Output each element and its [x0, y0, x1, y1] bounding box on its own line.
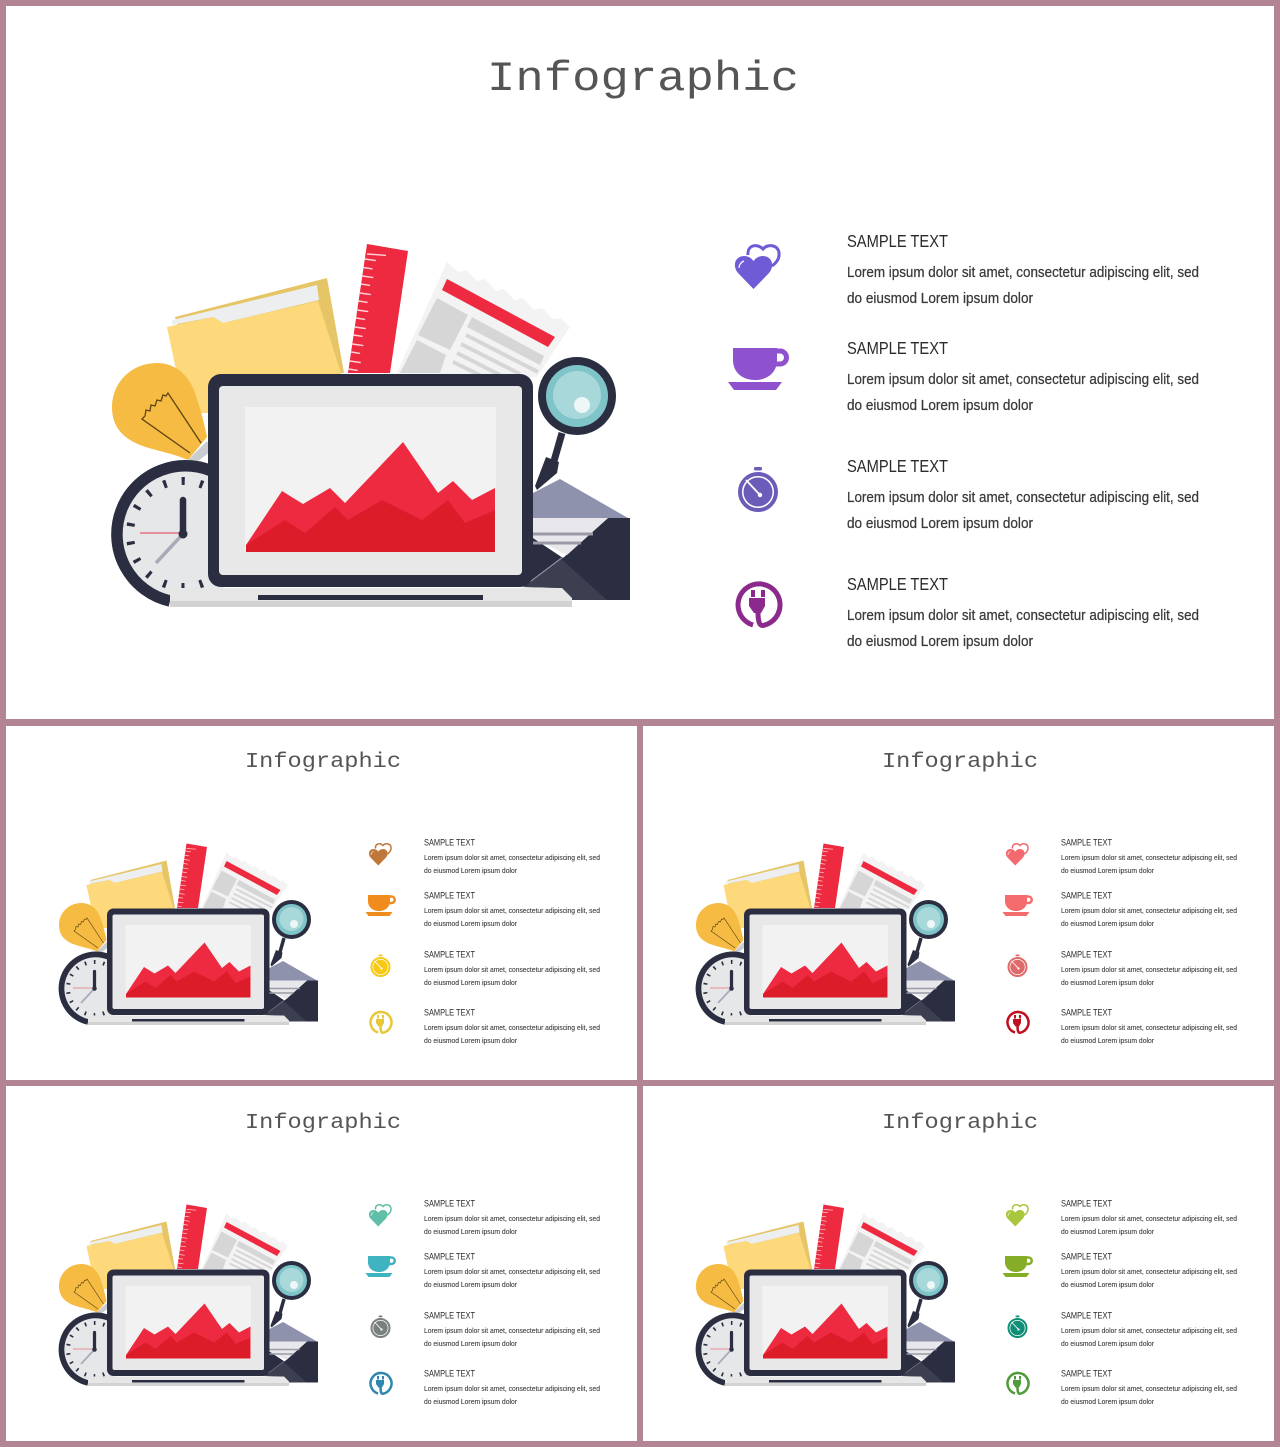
text blocks: SAMPLE TEXT [424, 950, 476, 960]
text blocks: Lorem ipsum dolor sit amet, consectetur adipiscing elit, sed [424, 853, 600, 862]
icon: plug [1008, 1373, 1029, 1394]
folder [167, 278, 344, 413]
text blocks: SAMPLE TEXT [1061, 1310, 1113, 1320]
icon: cup [366, 1256, 395, 1277]
text block 3: Lorem ipsum dolor sit amet, consectetur adipiscing elit, sed [847, 490, 1199, 506]
text blocks: Lorem ipsum dolor sit amet, consectetur adipiscing elit, sed [424, 1023, 600, 1032]
text blocks: do eiusmod Lorem ipsum dolor [1061, 1036, 1155, 1045]
text blocks: do eiusmod Lorem ipsum dolor [424, 978, 518, 987]
icon: plug [738, 584, 780, 626]
clock [117, 466, 251, 601]
panel: red variant [643, 726, 1274, 1080]
text blocks: SAMPLE TEXT [424, 1310, 476, 1320]
icon: cup [1002, 895, 1032, 916]
text blocks: do eiusmod Lorem ipsum dolor [424, 1280, 518, 1289]
magnifying glass [535, 357, 616, 490]
text blocks: SAMPLE TEXT [424, 1368, 476, 1378]
illustration [696, 1204, 955, 1386]
icon: stopwatch [1008, 1316, 1026, 1337]
illustration [59, 1204, 318, 1386]
icon: hearts [1006, 1205, 1028, 1226]
laptop screen [208, 374, 533, 587]
text blocks: SAMPLE TEXT [1061, 1252, 1113, 1262]
ruler [348, 244, 408, 373]
icon: hearts [735, 246, 779, 289]
text blocks: SAMPLE TEXT [1061, 1198, 1113, 1208]
text blocks: Lorem ipsum dolor sit amet, consectetur adipiscing elit, sed [424, 906, 600, 915]
title: Infographic [245, 1112, 401, 1135]
newspaper [395, 262, 570, 377]
text blocks: do eiusmod Lorem ipsum dolor [1061, 1397, 1155, 1406]
text block 4: SAMPLE TEXT [847, 574, 948, 594]
text blocks: SAMPLE TEXT [1061, 838, 1113, 848]
icon: plug [1008, 1012, 1029, 1033]
text blocks: Lorem ipsum dolor sit amet, consectetur adipiscing elit, sed [1061, 1267, 1237, 1276]
text blocks: Lorem ipsum dolor sit amet, consectetur adipiscing elit, sed [1061, 1326, 1237, 1335]
text blocks: Lorem ipsum dolor sit amet, consectetur adipiscing elit, sed [424, 965, 600, 974]
icon: plug [371, 1373, 392, 1394]
text blocks [1061, 838, 1237, 1045]
text block 1: do eiusmod Lorem ipsum dolor [847, 291, 1033, 307]
text blocks: SAMPLE TEXT [1061, 890, 1113, 900]
text blocks: Lorem ipsum dolor sit amet, consectetur adipiscing elit, sed [424, 1384, 600, 1393]
text blocks: do eiusmod Lorem ipsum dolor [424, 1036, 518, 1045]
text blocks: Lorem ipsum dolor sit amet, consectetur adipiscing elit, sed [1061, 1384, 1237, 1393]
light bulb [112, 363, 211, 462]
text blocks: SAMPLE TEXT [424, 890, 476, 900]
text block 4 [847, 574, 1199, 650]
text blocks: Lorem ipsum dolor sit amet, consectetur adipiscing elit, sed [424, 1326, 600, 1335]
text blocks: Lorem ipsum dolor sit amet, consectetur adipiscing elit, sed [424, 1267, 600, 1276]
text blocks: do eiusmod Lorem ipsum dolor [424, 1397, 518, 1406]
text blocks: do eiusmod Lorem ipsum dolor [1061, 866, 1155, 875]
text blocks: do eiusmod Lorem ipsum dolor [1061, 1280, 1155, 1289]
text block 1 [847, 231, 1199, 307]
text blocks [424, 1198, 600, 1406]
text blocks [1061, 1198, 1237, 1406]
icon: stopwatch [1008, 954, 1026, 976]
text blocks: SAMPLE TEXT [424, 1198, 476, 1208]
text blocks: do eiusmod Lorem ipsum dolor [1061, 919, 1155, 928]
illustration: office desk with laptop [112, 244, 630, 607]
title: Infographic [882, 751, 1038, 774]
text blocks [424, 838, 600, 1045]
area chart [246, 442, 495, 552]
text blocks: do eiusmod Lorem ipsum dolor [1061, 1227, 1155, 1236]
text block 2: Lorem ipsum dolor sit amet, consectetur adipiscing elit, sed [847, 372, 1199, 388]
panel: green variant [643, 1086, 1274, 1441]
panel: main slide [6, 6, 1274, 719]
text blocks: Lorem ipsum dolor sit amet, consectetur adipiscing elit, sed [1061, 906, 1237, 915]
text block 3: SAMPLE TEXT [847, 456, 948, 476]
icon: hearts [1006, 844, 1028, 866]
text blocks: SAMPLE TEXT [1061, 1008, 1113, 1018]
text blocks: SAMPLE TEXT [424, 1252, 476, 1262]
text blocks: SAMPLE TEXT [1061, 1368, 1113, 1378]
text blocks: do eiusmod Lorem ipsum dolor [1061, 1339, 1155, 1348]
text blocks: SAMPLE TEXT [1061, 950, 1113, 960]
icon: cup [366, 895, 395, 916]
text block 2 [847, 338, 1199, 414]
title: Infographic [245, 751, 401, 774]
text blocks: do eiusmod Lorem ipsum dolor [424, 866, 518, 875]
text blocks: SAMPLE TEXT [424, 838, 476, 848]
text block 2: SAMPLE TEXT [847, 338, 948, 358]
icon: plug [371, 1012, 392, 1033]
icon: stopwatch [740, 467, 776, 510]
text blocks: Lorem ipsum dolor sit amet, consectetur adipiscing elit, sed [1061, 853, 1237, 862]
text blocks: do eiusmod Lorem ipsum dolor [424, 1339, 518, 1348]
panel: teal variant [6, 1086, 637, 1441]
icon: stopwatch [372, 1316, 390, 1337]
laptop base [170, 588, 572, 607]
icon: stopwatch [372, 954, 390, 976]
text block 2: do eiusmod Lorem ipsum dolor [847, 398, 1033, 414]
text block 3: do eiusmod Lorem ipsum dolor [847, 516, 1033, 532]
illustration [696, 844, 955, 1025]
text block 1: Lorem ipsum dolor sit amet, consectetur adipiscing elit, sed [847, 265, 1199, 281]
text blocks: Lorem ipsum dolor sit amet, consectetur adipiscing elit, sed [424, 1214, 600, 1223]
text blocks: Lorem ipsum dolor sit amet, consectetur adipiscing elit, sed [1061, 1214, 1237, 1223]
text blocks: do eiusmod Lorem ipsum dolor [424, 1227, 518, 1236]
icon: cup [728, 348, 787, 390]
text blocks: do eiusmod Lorem ipsum dolor [1061, 978, 1155, 987]
icon: cup [1002, 1256, 1032, 1277]
panel: orange and yellow variant [6, 726, 637, 1080]
text blocks: do eiusmod Lorem ipsum dolor [424, 919, 518, 928]
text block 1: SAMPLE TEXT [847, 231, 948, 251]
text blocks: Lorem ipsum dolor sit amet, consectetur adipiscing elit, sed [1061, 965, 1237, 974]
title: Infographic [487, 55, 799, 103]
text blocks: SAMPLE TEXT [424, 1008, 476, 1018]
text block 4: Lorem ipsum dolor sit amet, consectetur adipiscing elit, sed [847, 608, 1199, 624]
title: Infographic [882, 1112, 1038, 1135]
text block 3 [847, 456, 1199, 532]
envelope [523, 479, 630, 600]
text blocks: Lorem ipsum dolor sit amet, consectetur adipiscing elit, sed [1061, 1023, 1237, 1032]
illustration [59, 844, 318, 1025]
text block 4: do eiusmod Lorem ipsum dolor [847, 634, 1033, 650]
icon: hearts [369, 844, 391, 866]
icon: hearts [369, 1205, 391, 1226]
